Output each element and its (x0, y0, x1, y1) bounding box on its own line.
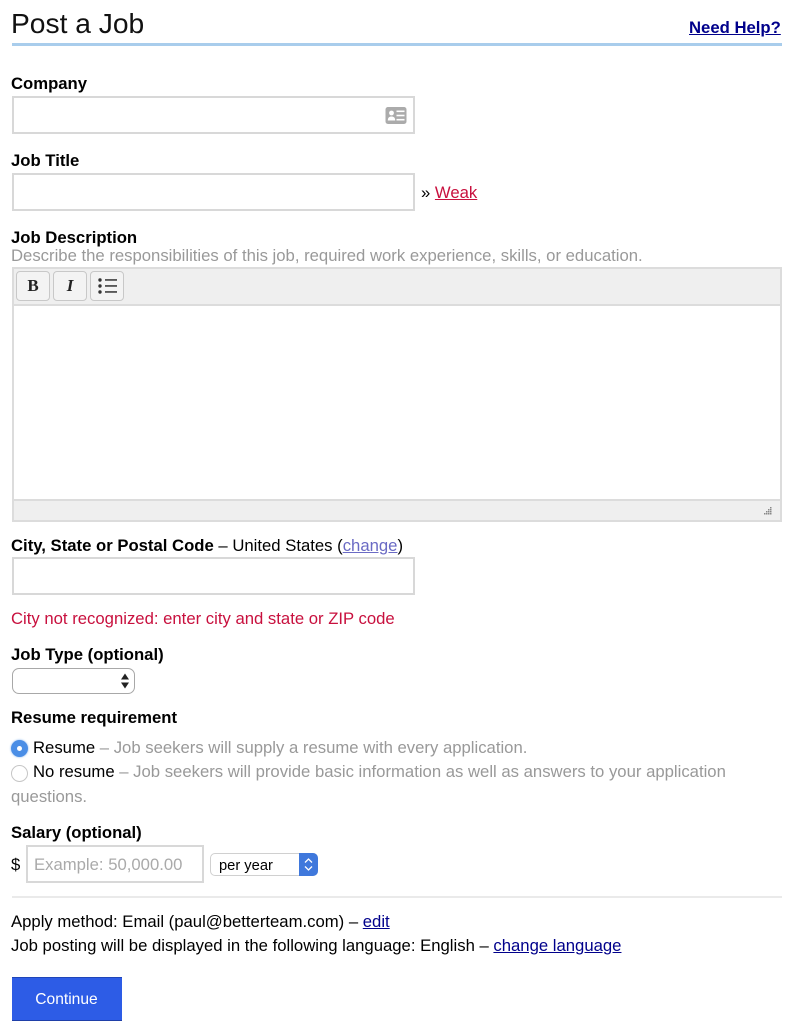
editor toolbar (14, 269, 780, 306)
language: Job posting will be displayed in the following language: English – change language (11, 936, 621, 955)
job type select (12, 668, 135, 694)
radio: resume selected (11, 740, 28, 757)
icon: select arrows (121, 674, 129, 688)
salary period select (210, 853, 318, 876)
divider (12, 896, 782, 898)
job title label: Job Title (11, 151, 79, 170)
bold button (16, 271, 50, 301)
job type label: Job Type (optional) (11, 645, 164, 664)
company input (12, 96, 415, 134)
location label: City, State or Postal Code – United States (change) (11, 536, 403, 555)
company label: Company (11, 74, 87, 93)
icon: resize grip (764, 507, 772, 514)
job description hint: Describe the responsibilities of this job, required work experience, skills, or education. (11, 246, 643, 265)
radio: no resume (11, 765, 28, 782)
period text: per year (219, 858, 273, 874)
apply method: Apply method: Email (paul@betterteam.com) – edit (11, 912, 390, 931)
salary placeholder: Example: 50,000.00 (34, 855, 182, 874)
title: Post a Job (11, 7, 144, 39)
editor status bar (14, 499, 780, 520)
job title strength: » Weak (421, 183, 477, 202)
currency symbol: $ (11, 855, 20, 874)
title underline (12, 43, 782, 46)
rich text editor (12, 267, 782, 522)
no resume option continuation: questions. (11, 787, 87, 806)
continue button: Continue (35, 991, 98, 1008)
help link: Need Help? (689, 18, 781, 37)
bold button: B (27, 276, 39, 295)
location input (12, 557, 415, 595)
location error: City not recognized: enter city and state or ZIP code (11, 609, 395, 628)
italic button: I (67, 276, 73, 295)
list button (90, 271, 124, 301)
continue button (12, 977, 122, 1021)
job description label: Job Description (11, 228, 137, 247)
salary label: Salary (optional) (11, 823, 142, 842)
select stepper (299, 853, 318, 876)
icon: contact card (386, 107, 406, 124)
resume requirement label: Resume requirement (11, 708, 177, 727)
salary input (26, 845, 204, 883)
resume option: Resume – Job seekers will supply a resume with every application. (33, 738, 527, 757)
job title input (12, 173, 415, 211)
no resume option: No resume – Job seekers will provide basic information as well as answers to your application (33, 762, 726, 781)
italic button (53, 271, 87, 301)
